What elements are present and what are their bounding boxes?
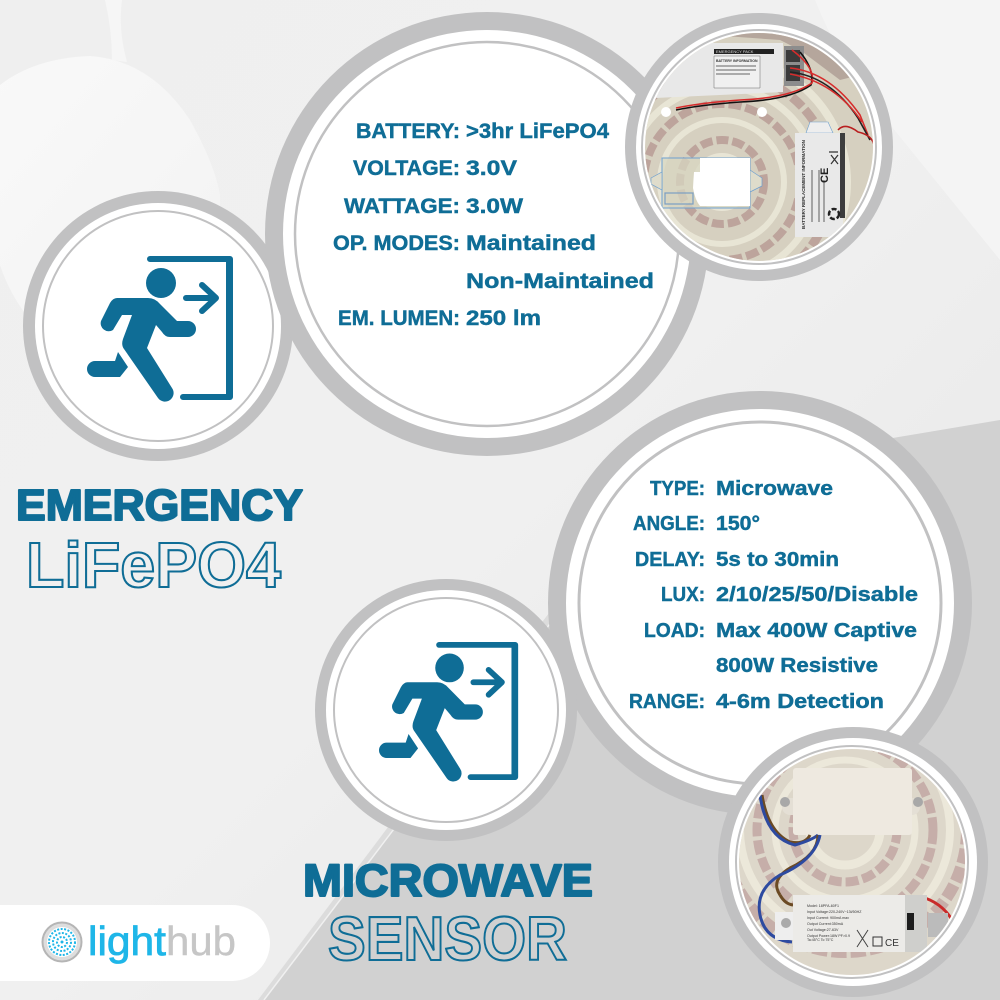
text: emergency specifications: >3hr LiFePO4 xyxy=(466,120,609,143)
text: sensor specifications: Microwave xyxy=(716,478,833,500)
photo: battery pack wiring xyxy=(645,33,873,261)
icon: running exit figure xyxy=(379,642,518,782)
circle: emergency pack photo xyxy=(625,13,893,281)
photo: sensor driver wiring xyxy=(739,749,965,975)
text: emergency specifications: 250 lm xyxy=(466,307,541,330)
wordmark: light xyxy=(88,918,167,964)
photo: sensor driver wiring: Output Power:18W PF>0.9 xyxy=(807,934,850,938)
icon: logo lamp xyxy=(42,922,82,962)
photo: sensor driver wiring: CE xyxy=(885,938,899,949)
text: sensor specifications: Max 400W Captive xyxy=(716,620,917,642)
photo: sensor driver wiring: Output Current:350mA xyxy=(807,922,844,926)
photo: sensor driver wiring: Out Voltage:27-63V xyxy=(807,928,839,932)
text: emergency specifications: 3.0V xyxy=(466,157,517,180)
text: sensor specifications: 2/10/25/50/Disable xyxy=(716,584,918,606)
title: sensor: SENSOR xyxy=(328,905,567,974)
wordmark: hub xyxy=(166,918,236,964)
photo: sensor driver wiring: Input Current: 900mA max xyxy=(807,916,849,920)
photo: battery pack wiring: EMERGENCY PACK xyxy=(716,49,754,54)
text: sensor specifications: 150° xyxy=(716,513,760,535)
circle: sensor icon xyxy=(315,579,577,841)
text: emergency specifications: BATTERY: xyxy=(356,120,460,143)
icon: running exit figure xyxy=(87,256,233,402)
photo: sensor driver wiring: Model: 18PFA-60F1 xyxy=(807,904,839,908)
text: emergency specifications: 3.0W xyxy=(466,195,523,218)
text: sensor specifications: 4-6m Detection xyxy=(716,691,884,713)
text: emergency specifications: EM. LUMEN: xyxy=(338,307,460,330)
text: sensor specifications: 5s to 30min xyxy=(716,549,839,571)
text: sensor specifications: LOAD: xyxy=(644,620,705,642)
logo: lighthub xyxy=(0,905,270,981)
photo: battery pack wiring: BATTERY INFORMATION xyxy=(716,59,758,63)
text: emergency specifications: WATTAGE: xyxy=(344,195,460,218)
text: emergency specifications xyxy=(333,120,654,330)
circle: sensor photo xyxy=(718,708,988,997)
text: sensor specifications: LUX: xyxy=(661,584,705,606)
photo: sensor driver wiring: Input Voltage:220-240V~13t/50HZ xyxy=(807,910,862,914)
circle: emergency icon xyxy=(23,191,293,461)
title: emergency: EMERGENCY xyxy=(16,481,303,530)
circle: sensor specs xyxy=(548,391,972,815)
circle: emergency specs xyxy=(265,12,709,456)
photo: battery pack wiring: BATTERY REPLACEMENT INFORMATION xyxy=(801,140,806,229)
text: emergency specifications: VOLTAGE: xyxy=(353,157,460,180)
text: sensor specifications: RANGE: xyxy=(629,691,705,713)
title: microwave: MICROWAVE xyxy=(303,855,593,906)
title: LiFePO4: LiFePO4 xyxy=(26,529,281,601)
text: sensor specifications xyxy=(629,478,918,713)
text: emergency specifications: Maintained xyxy=(466,232,596,255)
text: sensor specifications: TYPE: xyxy=(650,478,705,500)
text: sensor specifications: DELAY: xyxy=(635,549,705,571)
text: sensor specifications: 800W Resistive xyxy=(716,655,878,677)
photo: battery pack wiring: CE xyxy=(819,168,831,183)
text: emergency specifications: OP. MODES: xyxy=(333,232,460,255)
text: emergency specifications: Non-Maintained xyxy=(466,270,654,293)
text: sensor specifications: ANGLE: xyxy=(633,513,705,535)
photo: sensor driver wiring: Ta:45°C Tc:75°C xyxy=(807,938,834,942)
